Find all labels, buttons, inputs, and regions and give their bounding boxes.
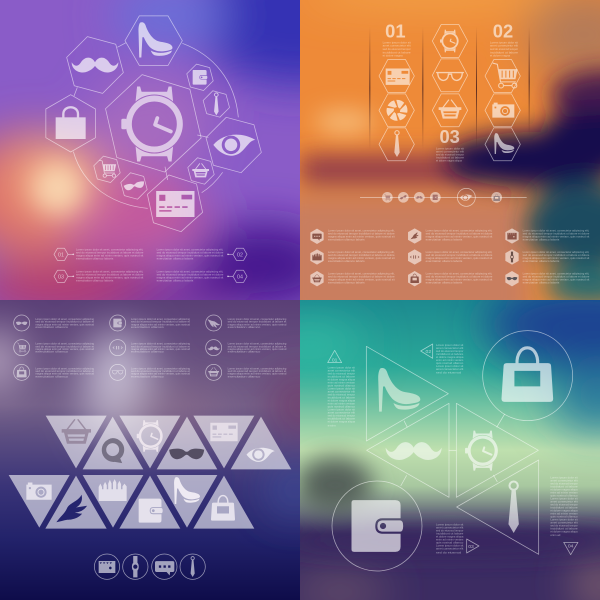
step 01: [54, 247, 144, 261]
icon list: exercitation ullamco laboris: [426, 281, 463, 285]
text block left: sed do eiusmod tempor: [328, 372, 355, 376]
icon: moustache: [72, 58, 118, 72]
icon list: magna aliqua enim ad minim veniam, quis nostrud: [228, 347, 287, 351]
text block left: amet consectetur elit: [328, 369, 355, 373]
icon list: exercitation ullamco laboris: [426, 259, 463, 263]
panel: purple hexagon infographic: [0, 0, 300, 300]
panel: teal triangles infographic: [255, 280, 600, 600]
text block top: incididunt ut labore: [436, 352, 464, 356]
text block top: [436, 343, 464, 374]
heading 01: amet consectetur elit: [383, 44, 411, 48]
text block left: incididunt ut labore: [328, 417, 355, 421]
icon list: Lorem ipsum dolor sit amet, consectetur adipiscing elit,: [523, 229, 589, 233]
step 03: Lorem ipsum dolor sit amet, consectetur adipiscing elit,: [76, 269, 143, 273]
text block right: sed do eiusmod tempor: [550, 482, 578, 486]
text block right: amet consectetur elit: [550, 479, 578, 483]
icon: watch: [440, 30, 459, 52]
icon list: [14, 315, 287, 380]
icon list: exercitation ullamco laboris: [328, 259, 365, 263]
text block top: Lorem ipsum dolor sit: [436, 364, 463, 368]
icon list: exercitation ullamco: [228, 325, 261, 329]
text block right: enim ad: [550, 533, 561, 537]
text block top: amet consectetur elit: [436, 346, 463, 350]
icon: high heel: [138, 22, 172, 57]
text block right: amet consectetur elit: [550, 521, 578, 525]
heading 01: incididunt ut labore: [383, 50, 411, 54]
icon list: sed do eiusmod tempor incididunt ut labore et: [131, 320, 190, 324]
icon: cart: [493, 63, 518, 88]
step 02: Lorem ipsum dolor sit amet, consectetur adipiscing elit,: [157, 247, 223, 251]
step 02: [157, 247, 247, 261]
icon list: magna aliqua enim ad minim veniam, quis nostrud: [35, 372, 94, 376]
icon list: magna aliqua enim ad minim veniam, quis nostrud sit: [426, 235, 492, 239]
step 03: exercitation ullamco laboris: [76, 279, 114, 283]
step 01: 01: [58, 252, 64, 258]
icon list: Lorem ipsum dolor sit amet, consectetur adipiscing: [131, 317, 190, 321]
step 04: Lorem ipsum dolor sit amet, consectetur adipiscing elit,: [157, 269, 223, 273]
icon list: exercitation ullamco: [35, 350, 68, 354]
text block left: quis nostrud ullamco: [328, 405, 355, 409]
icon: bag: [501, 348, 553, 402]
text block right: incididunt ut labore: [550, 485, 578, 489]
panel: orange columns infographic: [300, 0, 600, 300]
text block left: sed do eiusmod tempor: [328, 414, 355, 418]
text block bottom: [436, 523, 464, 555]
icon list: sed do eiusmod tempor incididunt ut labore et dolore: [328, 275, 395, 279]
icon list: magna aliqua enim ad minim veniam, quis nostrud sit: [523, 256, 589, 260]
icon list: magna aliqua enim ad minim veniam, quis nostrud sit: [523, 235, 589, 239]
icon: shopping bag: [56, 107, 86, 139]
step 02: exercitation ullamco laboris: [157, 257, 194, 261]
icon list: sed do eiusmod tempor incididunt ut labore et: [35, 369, 94, 373]
step 02: 02: [237, 252, 243, 258]
icon list: exercitation ullamco laboris: [523, 259, 560, 263]
triangle mosaic: [9, 416, 291, 529]
icon: basket: [62, 420, 91, 444]
icon list: Lorem ipsum dolor sit amet, consectetur adipiscing elit,: [426, 272, 492, 276]
icon list: magna aliqua enim ad minim veniam, quis nostrud sit: [328, 278, 395, 282]
text block top: quis nostrud ullamco: [436, 361, 464, 365]
badge 04: [564, 542, 578, 555]
icon list: Lorem ipsum dolor sit amet, consectetur adipiscing elit,: [523, 250, 589, 254]
icon list: magna aliqua enim ad minim veniam, quis nostrud: [131, 372, 190, 376]
badge 02: [421, 344, 433, 358]
icon list: Lorem ipsum dolor sit amet, consectetur adipiscing elit,: [328, 250, 395, 254]
icon: watch: [465, 431, 498, 471]
icon: wing: [56, 495, 87, 522]
icon: bag: [211, 496, 235, 521]
icon: heel: [494, 133, 514, 154]
step 01: exercitation ullamco laboris: [76, 257, 114, 261]
icon list: sed do eiusmod tempor incididunt ut labore et dolore: [426, 275, 493, 279]
icon list: magna aliqua enim ad minim veniam, quis nostrud: [131, 347, 190, 351]
icon: central watch: [121, 86, 183, 161]
text block left: et dolore magna aliqua: [328, 378, 355, 382]
text block left: incididunt ut labore: [328, 396, 355, 400]
icon list: exercitation ullamco: [228, 350, 261, 354]
icon: tie: [508, 482, 519, 533]
icon: wallet: [351, 500, 403, 552]
text block right: [550, 476, 578, 537]
icon list: sed do eiusmod tempor incididunt ut labore et: [35, 320, 94, 324]
text block bottom: quis nostrud ullamco: [436, 541, 464, 545]
icon: basket: [192, 164, 209, 177]
text block top: sed do eiusmod tempor: [436, 349, 463, 353]
step 02: sed do eiusmod tempor incididunt ut labore et dolore: [157, 250, 224, 254]
icon list: magna aliqua enim ad minim veniam, quis nostrud sit: [328, 256, 395, 260]
step 04: [157, 269, 247, 283]
text block right: et dolore magna aliqua: [550, 530, 578, 534]
icon list: [310, 228, 590, 286]
heading 01: 01: [385, 21, 406, 42]
icon list: exercitation ullamco laboris: [426, 238, 463, 242]
icon list: magna aliqua enim ad minim veniam, quis nostrud: [228, 372, 287, 376]
heading 02: sed do eiusmod tempor: [490, 47, 518, 51]
background: violet to navy blur: [0, 300, 328, 600]
heading 03: incididunt ut labore: [436, 155, 464, 159]
text block right: Lorem ipsum dolor sit: [550, 476, 578, 480]
triangle diagram: [332, 331, 573, 571]
icon list: sed do eiusmod tempor incididunt ut labore et dolore: [426, 253, 493, 257]
icon list: Lorem ipsum dolor sit amet, consectetur adipiscing: [35, 317, 94, 321]
panel: triangle mosaic infographic: [0, 300, 328, 600]
icon list: magna aliqua enim ad minim veniam, quis nostrud: [131, 322, 190, 326]
step 01: magna aliqua enim ad minim veniam, quis nostrud sit: [76, 253, 143, 257]
step 04: sed do eiusmod tempor incididunt ut labore et dolore: [157, 272, 224, 276]
text block left: Lorem ipsum dolor sit: [328, 387, 355, 391]
step 03: [54, 269, 144, 283]
text block left: amet consectetur elit: [328, 411, 355, 415]
heading 01: sed do eiusmod tempor: [383, 47, 411, 51]
icon: glasses: [437, 73, 463, 80]
icon list: Lorem ipsum dolor sit amet, consectetur adipiscing elit,: [426, 229, 492, 233]
hexagon icon grid: [379, 25, 520, 161]
icon: aperture: [387, 98, 407, 122]
icon list: exercitation ullamco: [228, 374, 261, 378]
text block bottom: Lorem ipsum dolor sit: [436, 523, 463, 527]
heading 01: Lorem ipsum dolor sit: [383, 41, 411, 45]
step 04: 04: [237, 274, 243, 280]
heading 01: [382, 24, 411, 57]
icon list: sed do eiusmod tempor incididunt ut labore et: [228, 344, 286, 348]
icon list: Lorem ipsum dolor sit amet, consectetur adipiscing: [131, 342, 190, 346]
text block left: Lorem ipsum dolor sit: [328, 366, 355, 370]
icon list: Lorem ipsum dolor sit amet, consectetur adipiscing: [228, 366, 287, 370]
icon list: sed do eiusmod tempor incididunt ut labore et: [228, 369, 286, 373]
icon timeline: [360, 188, 527, 206]
step 01: Lorem ipsum dolor sit amet, consectetur adipiscing elit,: [76, 247, 143, 251]
text block right: amet consectetur elit: [550, 500, 578, 504]
icon: credit card: [156, 191, 194, 217]
icon list: sed do eiusmod tempor incididunt ut labore et dolore: [523, 232, 590, 236]
icon: eye: [213, 135, 255, 156]
step 03: 03: [58, 274, 64, 280]
text block right: quis nostrud ullamco: [550, 494, 578, 498]
text block bottom: sed do eiusmod tempor: [436, 529, 463, 533]
text block bottom: amet consectetur elit: [436, 526, 463, 530]
text block bottom: incididunt ut labore: [436, 532, 464, 536]
icon list: Lorem ipsum dolor sit amet, consectetur adipiscing elit,: [426, 250, 492, 254]
icon: watch: [137, 420, 163, 452]
icon list: sed do eiusmod tempor incididunt ut labore et: [228, 320, 286, 324]
icon list: sed do eiusmod tempor incididunt ut labore et dolore: [328, 232, 395, 236]
icon list: magna aliqua enim ad minim veniam, quis nostrud: [35, 347, 94, 351]
heading 03: et dolore magna aliqua: [436, 158, 462, 162]
text block bottom: et dolore magna aliqua: [436, 535, 464, 539]
badge 03: 03: [468, 544, 474, 550]
icon list: Lorem ipsum dolor sit amet, consectetur adipiscing elit,: [523, 272, 589, 276]
icon list: sed do eiusmod tempor incididunt ut labore et: [35, 344, 94, 348]
text block left: amet consectetur elit: [328, 390, 355, 394]
icon list: exercitation ullamco: [35, 325, 68, 329]
icon list: magna aliqua enim ad minim veniam, quis nostrud: [228, 322, 287, 326]
heading 03: [436, 130, 464, 162]
icon: wallet: [139, 499, 163, 523]
icon list: magna aliqua enim ad minim veniam, quis nostrud: [35, 322, 94, 326]
badge 04: 04: [568, 544, 574, 550]
text block right: enim ad minim veniam: [550, 512, 578, 516]
text block right: sed do eiusmod tempor: [550, 524, 578, 528]
icon: card: [210, 423, 238, 441]
icon list: Lorem ipsum dolor sit amet, consectetur adipiscing elit,: [328, 272, 395, 276]
icon: wallet: [193, 70, 207, 85]
icon list: exercitation ullamco laboris: [523, 281, 560, 285]
background: orange blur: [300, 0, 600, 300]
icon list: sed do eiusmod tempor incididunt ut labore et dolore: [328, 253, 395, 257]
step 03: sed do eiusmod tempor incididunt ut labore et dolore: [76, 272, 144, 276]
text block right: quis nostrud ullamco: [550, 515, 578, 519]
heading 03: 03: [439, 126, 460, 147]
icon list: magna aliqua enim ad minim veniam, quis nostrud sit: [426, 278, 492, 282]
icon: moustache: [386, 442, 442, 460]
badge 01: 01: [332, 357, 338, 363]
hexagon diagram: [46, 16, 268, 236]
icon list: sed do eiusmod tempor incididunt ut labore et dolore: [523, 275, 590, 279]
icon: cart: [99, 160, 116, 177]
text block right: incididunt ut labore: [550, 506, 578, 510]
icon list: exercitation ullamco: [35, 374, 68, 378]
badge 02: 02: [426, 349, 431, 355]
icon list: sed do eiusmod tempor incididunt ut labore et dolore: [426, 232, 493, 236]
heading 02: Lorem ipsum dolor sit: [490, 41, 518, 45]
text block bottom: Lorem ipsum dolor sit: [436, 544, 463, 548]
icon: camera: [492, 103, 514, 118]
icon list: magna aliqua enim ad minim veniam, quis nostrud sit: [328, 235, 395, 239]
text block left: sed do eiusmod tempor: [328, 393, 355, 397]
text block left: et dolore magna aliqua: [328, 420, 355, 424]
icon: heel: [174, 477, 200, 504]
icon list: exercitation ullamco laboris: [328, 238, 365, 242]
step 01: sed do eiusmod tempor incididunt ut labore et dolore: [76, 250, 144, 254]
text block bottom: sed do eiusmod: [436, 551, 462, 555]
text block left: et dolore magna aliqua: [328, 399, 355, 403]
heading 02: [490, 24, 518, 57]
column dividers: [369, 27, 530, 150]
heading 03: Lorem ipsum dolor sit: [436, 146, 464, 150]
text block right: sed do eiusmod tempor: [550, 503, 578, 507]
background: purple blur: [0, 0, 300, 300]
icon list: exercitation ullamco: [131, 325, 164, 329]
icon: sunglasses: [124, 181, 144, 190]
icon list: exercitation ullamco: [131, 350, 164, 354]
step 04: exercitation ullamco laboris: [157, 279, 194, 283]
heading 02: 02: [493, 21, 513, 42]
heading 02: incididunt ut labore: [490, 50, 518, 54]
text block left: Lorem ipsum dolor sit: [328, 408, 355, 412]
icon: sunglasses: [169, 449, 204, 459]
icon list: magna aliqua enim ad minim veniam, quis nostrud sit: [426, 256, 492, 260]
heading 02: amet consectetur elit: [490, 44, 518, 48]
icon list: Lorem ipsum dolor sit amet, consectetur adipiscing: [228, 317, 287, 321]
text block right: et dolore magna aliqua: [550, 509, 578, 513]
step 03: magna aliqua enim ad minim veniam, quis nostrud sit: [76, 275, 143, 279]
icon: tie: [394, 131, 400, 157]
icon list: Lorem ipsum dolor sit amet, consectetur adipiscing: [35, 366, 94, 370]
icon: fence: [99, 479, 127, 501]
text block left: enim ad minim veniam: [328, 402, 355, 406]
step 02: magna aliqua enim ad minim veniam, quis nostrud sit: [157, 253, 223, 257]
icon list: exercitation ullamco laboris: [523, 238, 560, 242]
icon: card: [386, 69, 410, 85]
background: teal blur: [255, 280, 600, 600]
heading 03: sed do eiusmod tempor: [436, 152, 464, 156]
heading 03: amet consectetur elit: [436, 149, 464, 153]
icon: tie: [214, 93, 219, 115]
bottom icon row: [94, 554, 205, 579]
icon list: Lorem ipsum dolor sit amet, consectetur adipiscing: [131, 366, 190, 370]
text block left: quis nostrud ullamco: [328, 384, 355, 388]
badge 01: [328, 350, 342, 363]
icon: basket: [439, 100, 461, 119]
text block top: enim ad minim veniam: [436, 358, 464, 362]
text block right: Lorem ipsum dolor sit: [550, 518, 578, 522]
text block right: et dolore magna aliqua: [550, 488, 578, 492]
step 04: magna aliqua enim ad minim veniam, quis nostrud sit: [157, 275, 223, 279]
icon list: sed do eiusmod tempor incididunt ut labore et: [131, 344, 190, 348]
icon list: Lorem ipsum dolor sit amet, consectetur adipiscing: [35, 342, 94, 346]
icon: eye: [246, 448, 275, 462]
text block right: Lorem ipsum dolor sit: [550, 497, 578, 501]
text block bottom: amet consectetur elit: [436, 547, 463, 551]
text block right: enim ad minim veniam: [550, 491, 578, 495]
icon list: Lorem ipsum dolor sit amet, consectetur adipiscing: [228, 342, 287, 346]
text block left: incididunt ut labore: [328, 375, 355, 379]
icon list: sed do eiusmod tempor incididunt ut labore et: [131, 369, 190, 373]
icon list: Lorem ipsum dolor sit amet, consectetur adipiscing elit,: [328, 229, 395, 233]
text block top: et dolore magna aliqua: [436, 355, 464, 359]
icon: camera: [26, 483, 52, 500]
icon list: sed do eiusmod tempor incididunt ut labore et dolore: [523, 253, 590, 257]
icon: search bubble: [102, 438, 124, 463]
text block top: Lorem ipsum dolor sit: [436, 343, 463, 347]
badge 03: [467, 539, 479, 553]
text block right: incididunt ut labore: [550, 527, 578, 531]
icon list: exercitation ullamco: [131, 374, 164, 378]
text block top: sed do eiusmod: [436, 370, 462, 374]
heading 02: et dolore magna: [490, 53, 510, 57]
text block left: enim: [328, 424, 336, 428]
text block bottom: enim ad minim veniam: [436, 538, 464, 542]
heading 01: et dolore magna: [383, 53, 403, 57]
text block top: amet consectetur elit: [436, 367, 463, 371]
icon list: exercitation ullamco laboris: [328, 281, 365, 285]
text block left: enim ad minim veniam: [328, 381, 355, 385]
icon: heel: [378, 368, 420, 412]
text block left: [328, 366, 355, 428]
icon list: magna aliqua enim ad minim veniam, quis nostrud sit: [523, 278, 589, 282]
